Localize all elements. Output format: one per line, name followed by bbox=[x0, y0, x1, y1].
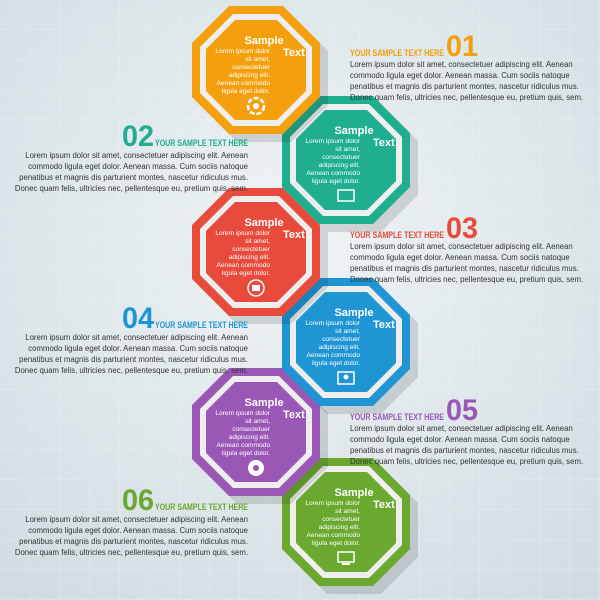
octagon 02 teal: sit amet, bbox=[335, 146, 360, 153]
octagon 03 red: sit amet, bbox=[245, 238, 270, 245]
octagon 01 orange: Lorem ipsum dolor bbox=[215, 48, 271, 55]
octagon 03 red: Sample bbox=[244, 217, 284, 229]
octagon 06 green: ligula eget dolor. bbox=[312, 540, 360, 547]
text block 02: 02 bbox=[122, 120, 154, 153]
text block 02: Donec quam felis, ultricies nec, pellentesque eu, pretium quis, sem. bbox=[15, 184, 248, 193]
octagon 03 red: adipiscing elit. bbox=[229, 254, 270, 261]
octagon 04 blue: sit amet, bbox=[335, 328, 360, 335]
octagon 04 blue: Text bbox=[373, 319, 395, 331]
octagon 05 purple: sit amet, bbox=[245, 418, 270, 425]
octagon 06 green: Text bbox=[373, 499, 395, 511]
octagon 03 red: Text bbox=[283, 229, 305, 241]
text block 02: commodo ligula eget dolor. Aenean massa. Cum sociis natoque bbox=[28, 162, 248, 171]
octagon 03 red: consectetuer bbox=[232, 246, 271, 253]
text block 06 bbox=[15, 484, 248, 557]
octagon 01 orange: Sample bbox=[244, 35, 284, 47]
text block 06: YOUR SAMPLE TEXT HERE bbox=[155, 502, 248, 512]
octagon 06 green: Sample bbox=[334, 487, 374, 499]
octagon 05 purple: Lorem ipsum dolor bbox=[215, 410, 271, 417]
text block 05: 05 bbox=[446, 394, 478, 427]
text block 01: penatibus et magnis dis parturient montes, nascetur ridiculus mus. bbox=[350, 82, 579, 91]
text block 05: YOUR SAMPLE TEXT HERE bbox=[350, 412, 444, 422]
text block 04: commodo ligula eget dolor. Aenean massa. Cum sociis natoque bbox=[28, 344, 248, 353]
octagon 03 red: Aenean commodo bbox=[216, 262, 270, 269]
octagon 06 green: adipiscing elit. bbox=[319, 524, 360, 531]
text block 04: YOUR SAMPLE TEXT HERE bbox=[155, 320, 248, 330]
text block 01: Lorem ipsum dolor sit amet, consectetuer adipiscing elit. Aenean bbox=[350, 60, 573, 69]
text block 04: Lorem ipsum dolor sit amet, consectetuer adipiscing elit. Aenean bbox=[25, 333, 248, 342]
octagon 06 green bbox=[282, 458, 418, 594]
octagon 01 orange bbox=[192, 6, 328, 142]
octagon 06 green: sit amet, bbox=[335, 508, 360, 515]
octagon 02 teal bbox=[282, 96, 418, 232]
octagon 02 teal: Aenean commodo bbox=[306, 170, 360, 177]
octagon 02 teal: ligula eget dolor. bbox=[312, 178, 360, 185]
text block 04: Donec quam felis, ultricies nec, pellentesque eu, pretium quis, sem. bbox=[15, 366, 248, 375]
octagon 05 purple: Aenean commodo bbox=[216, 442, 270, 449]
octagon 04 blue: adipiscing elit. bbox=[319, 344, 360, 351]
text block 04: 04 bbox=[122, 302, 154, 335]
text block 04: penatibus et magnis dis parturient montes, nascetur ridiculus mus. bbox=[19, 355, 248, 364]
octagon 04 blue: Aenean commodo bbox=[306, 352, 360, 359]
octagon 05 purple bbox=[192, 368, 328, 504]
text block 01: YOUR SAMPLE TEXT HERE bbox=[350, 48, 444, 58]
octagon 02 teal: Lorem ipsum dolor bbox=[305, 138, 361, 145]
text block 05: Lorem ipsum dolor sit amet, consectetuer adipiscing elit. Aenean bbox=[350, 424, 573, 433]
text block 05: penatibus et magnis dis parturient montes, nascetur ridiculus mus. bbox=[350, 446, 579, 455]
octagon 01 orange: sit amet, bbox=[245, 56, 270, 63]
octagon 05 purple: Text bbox=[283, 409, 305, 421]
text block 05 bbox=[350, 394, 583, 466]
text block 03: 03 bbox=[446, 212, 478, 245]
text block 05: Donec quam felis, ultricies nec, pellentesque eu, pretium quis, sem. bbox=[350, 457, 583, 466]
octagon 04 blue: Sample bbox=[334, 307, 374, 319]
text block 02: Lorem ipsum dolor sit amet, consectetuer adipiscing elit. Aenean bbox=[25, 151, 248, 160]
octagon 01 orange: consectetuer bbox=[232, 64, 271, 71]
octagon 04 blue: ligula eget dolor. bbox=[312, 360, 360, 367]
octagon 02 teal: Sample bbox=[334, 125, 374, 137]
octagon 06 green: Aenean commodo bbox=[306, 532, 360, 539]
octagon 05 purple: Sample bbox=[244, 397, 284, 409]
text block 01: 01 bbox=[446, 30, 478, 63]
octagon 01 orange: Aenean commodo bbox=[216, 80, 270, 87]
text block 02: YOUR SAMPLE TEXT HERE bbox=[155, 138, 248, 148]
text block 06: penatibus et magnis dis parturient montes, nascetur ridiculus mus. bbox=[19, 537, 248, 546]
text block 02: penatibus et magnis dis parturient montes, nascetur ridiculus mus. bbox=[19, 173, 248, 182]
octagon 01 orange: Text bbox=[283, 47, 305, 59]
text block 03 bbox=[350, 212, 583, 284]
octagon 06 green: Lorem ipsum dolor bbox=[305, 500, 361, 507]
text block 01 bbox=[350, 30, 583, 102]
text block 03: commodo ligula eget dolor. Aenean massa. Cum sociis natoque bbox=[350, 253, 570, 262]
text block 01: commodo ligula eget dolor. Aenean massa. Cum sociis natoque bbox=[350, 71, 570, 80]
octagon 01 orange: ligula eget dolor. bbox=[222, 88, 270, 95]
text block 05: commodo ligula eget dolor. Aenean massa. Cum sociis natoque bbox=[350, 435, 570, 444]
text block 03: Lorem ipsum dolor sit amet, consectetuer adipiscing elit. Aenean bbox=[350, 242, 573, 251]
octagon 04 blue bbox=[282, 278, 418, 414]
octagon 06 green: consectetuer bbox=[322, 516, 361, 523]
octagon 05 purple: ligula eget dolor. bbox=[222, 450, 270, 457]
text block 06: commodo ligula eget dolor. Aenean massa. Cum sociis natoque bbox=[28, 526, 248, 535]
text block 03: penatibus et magnis dis parturient montes, nascetur ridiculus mus. bbox=[350, 264, 579, 273]
octagon 05 purple: consectetuer bbox=[232, 426, 271, 433]
octagon 03 red bbox=[192, 188, 328, 324]
text block 06: Lorem ipsum dolor sit amet, consectetuer adipiscing elit. Aenean bbox=[25, 515, 248, 524]
octagon 02 teal: Text bbox=[373, 137, 395, 149]
octagon 05 purple: adipiscing elit. bbox=[229, 434, 270, 441]
text block 03: Donec quam felis, ultricies nec, pellentesque eu, pretium quis, sem. bbox=[350, 275, 583, 284]
octagon 03 red: ligula eget dolor. bbox=[222, 270, 270, 277]
text block 04 bbox=[15, 302, 248, 375]
octagon 02 teal: adipiscing elit. bbox=[319, 162, 360, 169]
text block 06: Donec quam felis, ultricies nec, pellentesque eu, pretium quis, sem. bbox=[15, 548, 248, 557]
octagon 03 red: Lorem ipsum dolor bbox=[215, 230, 271, 237]
octagon 02 teal: consectetuer bbox=[322, 154, 361, 161]
text block 01: Donec quam felis, ultricies nec, pellentesque eu, pretium quis, sem. bbox=[350, 93, 583, 102]
text block 03: YOUR SAMPLE TEXT HERE bbox=[350, 230, 444, 240]
octagon 04 blue: Lorem ipsum dolor bbox=[305, 320, 361, 327]
text block 06: 06 bbox=[122, 484, 154, 517]
octagon 01 orange: adipiscing elit. bbox=[229, 72, 270, 79]
text block 02 bbox=[15, 120, 248, 193]
octagon 04 blue: consectetuer bbox=[322, 336, 361, 343]
